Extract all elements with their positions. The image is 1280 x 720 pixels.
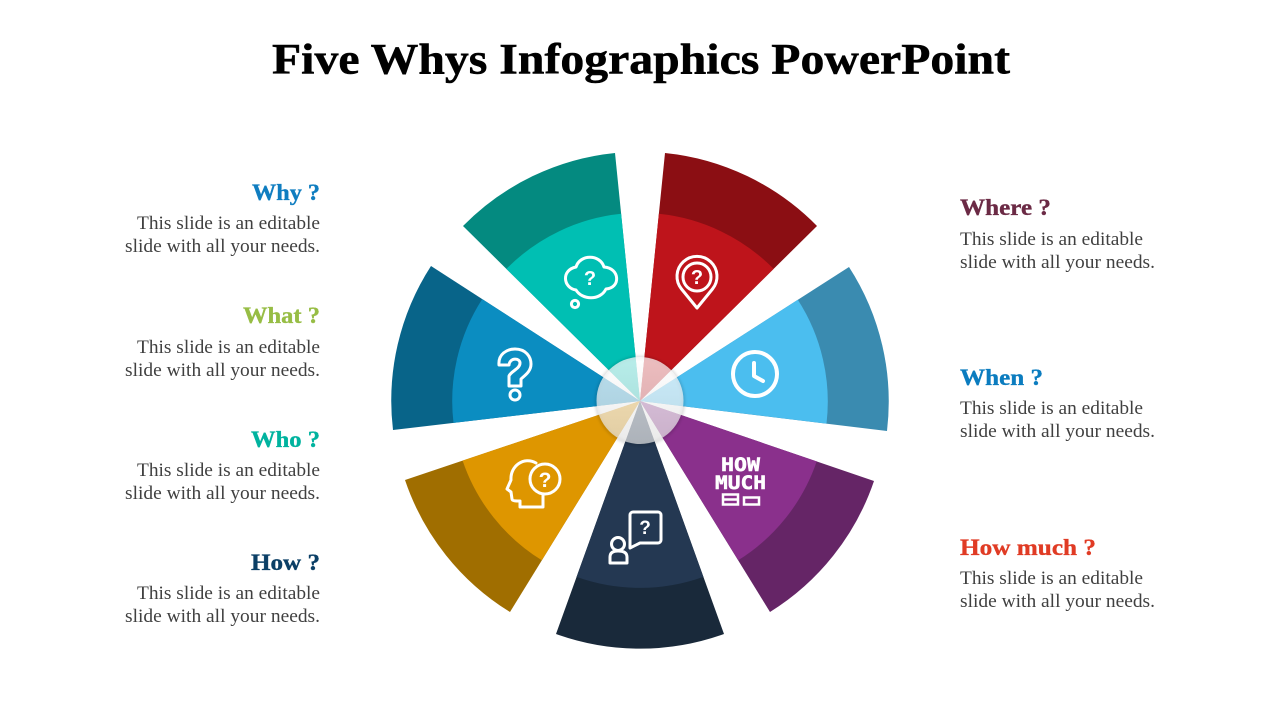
text block: when: slide with all your needs. (960, 421, 1155, 442)
pie diagram (391, 153, 889, 649)
text block: who (125, 427, 320, 504)
text block: how: How ? (251, 550, 320, 575)
text block: how much: slide with all your needs. (960, 591, 1155, 612)
text block: how much (960, 535, 1155, 612)
text block: where: slide with all your needs. (960, 252, 1155, 273)
icon: location pin: ? (691, 267, 703, 289)
icon: thought cloud: ? (584, 268, 596, 290)
text block: where: This slide is an editable (960, 229, 1143, 250)
icon: thought cloud (565, 257, 617, 308)
center glass circle (596, 357, 684, 444)
slice: teal why (463, 153, 640, 401)
text block: when: This slide is an editable (960, 398, 1143, 419)
text block: what: slide with all your needs. (125, 360, 320, 381)
text block: why (125, 180, 320, 257)
slice: blue what (391, 266, 640, 430)
icon: person with speech bubble: ? (639, 518, 651, 539)
text block: who: This slide is an editable (137, 460, 320, 481)
text block: when: When ? (960, 365, 1043, 390)
text block: why: slide with all your needs. (125, 236, 320, 257)
slice: navy how (556, 401, 724, 649)
text block: where (960, 195, 1155, 273)
text block: how much: How much ? (960, 535, 1096, 560)
text block: how (125, 550, 320, 627)
text block: who: slide with all your needs. (125, 483, 320, 504)
icon: head with question: ? (539, 469, 551, 492)
slice: purple how much (640, 401, 874, 612)
text block: how: slide with all your needs. (125, 606, 320, 627)
text block: when (960, 365, 1155, 442)
text block: what: What ? (243, 303, 320, 328)
text block: why: This slide is an editable (137, 213, 320, 234)
text block: what (125, 303, 320, 381)
text block: who: Who ? (251, 427, 320, 452)
icon: how much: HOW (721, 454, 761, 476)
icon: how much (715, 454, 766, 504)
icon: location pin (677, 256, 717, 308)
text block: where: Where ? (960, 195, 1051, 220)
icon: clock (733, 352, 777, 396)
slice: light blue when (640, 267, 889, 431)
text block: what: This slide is an editable (137, 337, 320, 358)
icon: question mark (499, 349, 531, 400)
text block: how much: This slide is an editable (960, 568, 1143, 589)
icon: how much: MUCH (715, 472, 766, 494)
icon: head with question (507, 461, 560, 507)
slice: gold who (405, 401, 640, 612)
text block: why: Why ? (252, 180, 320, 205)
icon: person with speech bubble (610, 512, 661, 563)
slice: red where (640, 153, 817, 401)
text block: how: This slide is an editable (137, 583, 320, 604)
title: Five Whys Infographics PowerPoint (272, 36, 1011, 84)
